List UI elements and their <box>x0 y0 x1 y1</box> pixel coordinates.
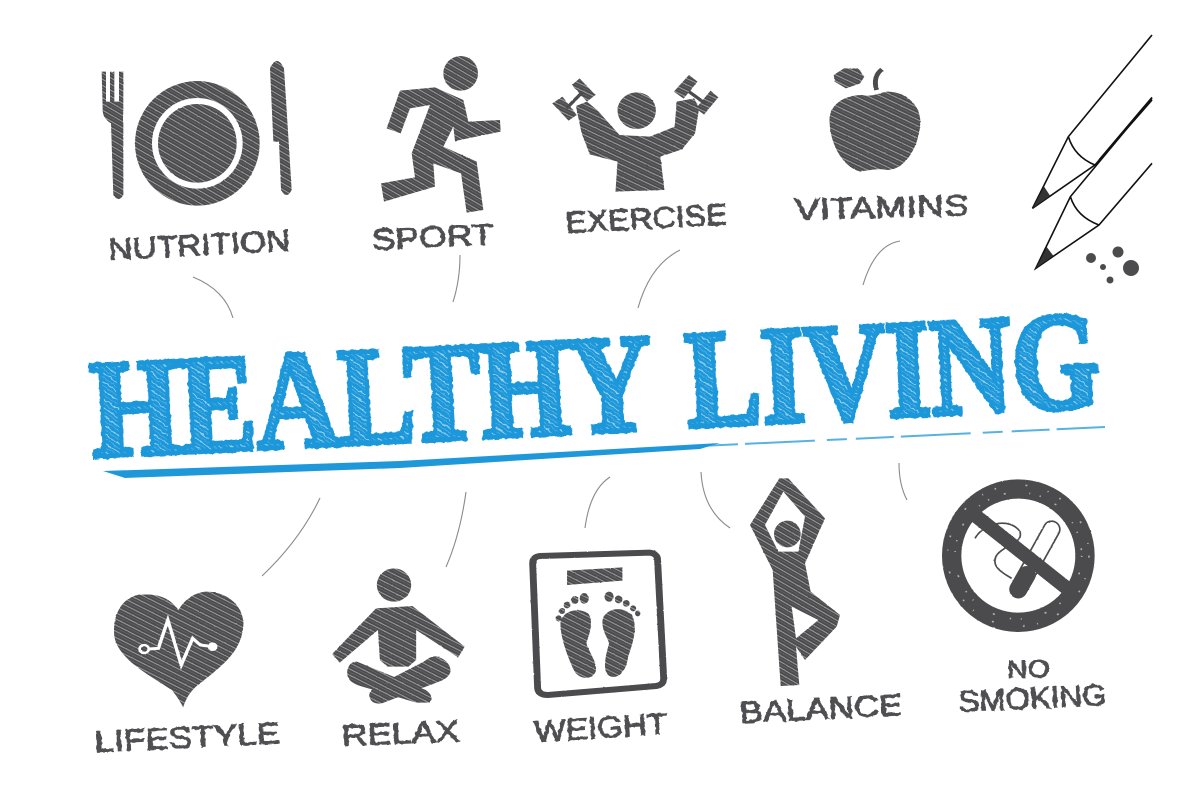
icon: apple <box>829 68 920 172</box>
label: no smoking: NO <box>1007 655 1050 684</box>
label: sport: SPORT <box>371 219 494 257</box>
icon: yoga balance figure <box>750 478 840 686</box>
label: vitamins: VITAMINS <box>794 189 969 227</box>
title: healthy living <box>87 283 1103 488</box>
label: lifestyle: LIFESTYLE <box>94 717 281 759</box>
icon: no smoking sign <box>948 485 1089 626</box>
label: weight: WEIGHT <box>533 708 668 749</box>
label: balance: BALANCE <box>739 689 903 730</box>
connector lines <box>193 241 907 576</box>
label: no smoking <box>958 655 1107 719</box>
icon: heart with pulse <box>114 592 243 707</box>
label: nutrition: NUTRITION <box>108 225 291 267</box>
title: healthy living: LIVING <box>682 283 1103 458</box>
icon: meditating figure <box>332 568 465 704</box>
title underline <box>103 427 1105 478</box>
label: no smoking: SMOKING <box>958 679 1107 719</box>
illustration: marker pens <box>1032 35 1152 268</box>
icon: exercise figure with dumbbells <box>552 75 718 192</box>
icon: plate and cutlery <box>102 61 292 206</box>
icon: runner <box>381 56 501 213</box>
icon: weighing scale with feet <box>533 553 664 695</box>
title: healthy living: HEALTHY <box>87 305 656 488</box>
icon: ink dots <box>1086 246 1139 284</box>
label: exercise: EXERCISE <box>565 199 728 240</box>
label: relax: RELAX <box>341 715 460 753</box>
